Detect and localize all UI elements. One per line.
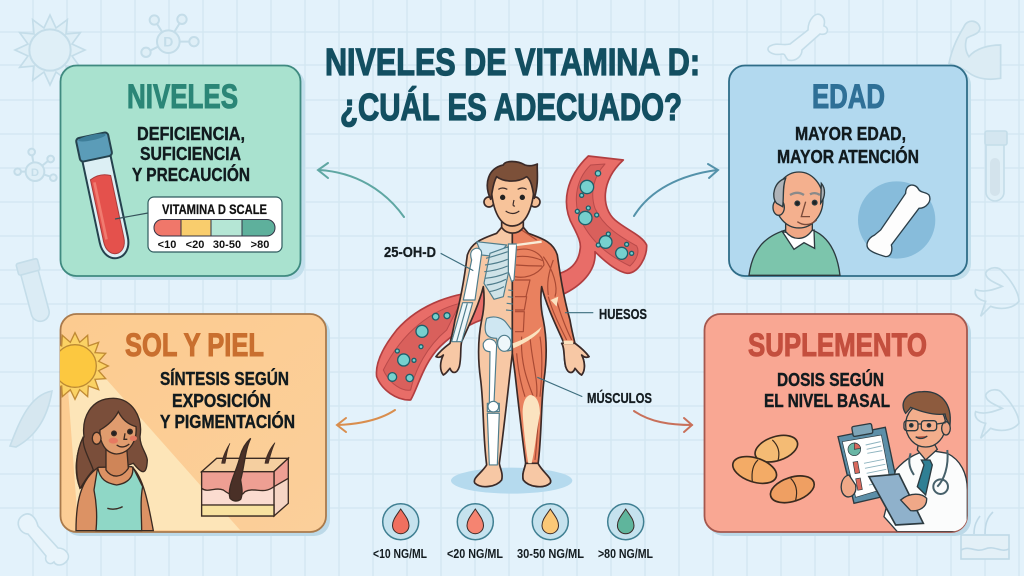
text: suplemento description: EL NIVEL BASAL <box>764 391 890 411</box>
icon: faded arm mid right <box>975 268 1019 316</box>
panel: edad <box>729 66 971 280</box>
icon: faded molecule left: D <box>31 167 39 179</box>
icon: faded molecule left <box>14 149 57 181</box>
tendons <box>513 297 573 463</box>
label: 25-OH-D: 25-OH-D <box>384 244 436 261</box>
label: huesos: HUESOS <box>599 306 647 323</box>
text: sol y piel description: Y PIGMENTACIÓN <box>160 411 295 432</box>
head <box>484 161 540 233</box>
legend item: 30 to 50: 30-50 NG/ML <box>517 546 584 561</box>
icon: faded tube left <box>16 258 53 324</box>
icon: faded skin block <box>961 512 1009 559</box>
icon: older man <box>749 172 840 275</box>
legend item: 30 to 50 <box>517 504 584 561</box>
text: niveles description <box>132 124 250 185</box>
icon: faded tube right <box>985 131 1007 201</box>
muscle detail <box>515 230 572 460</box>
sunlight beam <box>68 368 240 530</box>
vitamin d scale: VITAMINA D SCALE <box>162 201 267 217</box>
label: músculos: MÚSCULOS <box>587 389 652 407</box>
connector line <box>115 213 148 219</box>
text: edad description: MAYOR EDAD, <box>795 124 906 144</box>
icon: faded molecule top: D <box>163 34 173 50</box>
arrow: centre to sol y piel <box>337 410 395 432</box>
heading: suplemento: SUPLEMENTO <box>748 327 927 363</box>
ground shadow <box>451 468 572 494</box>
arrow: centre to edad <box>634 164 718 216</box>
body left half skin <box>436 227 512 487</box>
icon: faded bone top right <box>768 14 827 60</box>
icon: doctor <box>838 392 967 532</box>
legend item: under 10 <box>373 504 427 561</box>
icon: bone in circle <box>858 181 935 259</box>
artery upper <box>560 156 647 295</box>
vitamin d scale: <20 <box>186 239 204 251</box>
illustration: human body with vessel <box>376 156 647 494</box>
vitamin d scale <box>148 197 282 252</box>
vitamin d scale: 30-50 <box>213 239 241 251</box>
arrow: centre to niveles <box>318 163 404 217</box>
heading: niveles: NIVELES <box>127 78 238 116</box>
panel: niveles <box>60 66 305 280</box>
skin hands and feet <box>523 343 589 487</box>
legend item: under 20 <box>447 504 503 561</box>
text: edad description: MAYOR ATENCIÓN <box>777 146 919 167</box>
text: suplemento description <box>764 369 890 411</box>
icon: skin cross-section <box>202 438 288 516</box>
legend item: under 10: <10 NG/ML <box>373 546 427 561</box>
text: niveles description: Y PRECAUCIÓN <box>132 164 250 185</box>
text: sol y piel description: SÍNTESIS SEGÚN <box>160 368 289 389</box>
icon: faded arm lower right <box>975 390 1019 438</box>
body right half muscle <box>512 227 589 487</box>
title: ¿CUÁL ES ADECUADO? <box>340 85 682 129</box>
vitamin d scale: <10 <box>158 239 176 251</box>
legend item: over 80: >80 NG/ML <box>598 546 653 561</box>
text: sol y piel description <box>160 368 295 432</box>
vitamin d scale: >80 <box>251 239 269 251</box>
icon: faded arm top right <box>949 21 1001 79</box>
panel: suplemento <box>704 314 971 536</box>
heading: edad: EDAD <box>812 78 885 116</box>
leader lines <box>441 253 593 397</box>
text: suplemento description: DOSIS SEGÚN <box>777 369 884 390</box>
text: niveles description: SUFICIENCIA <box>140 144 241 164</box>
skeleton <box>452 242 542 465</box>
artery lower <box>376 292 487 400</box>
icon: sun <box>60 331 110 401</box>
icon: blood test tube <box>76 132 134 261</box>
title: NIVELES DE VITAMINA D: <box>325 42 700 84</box>
icon: faded sun <box>15 15 85 85</box>
icon: faded molecule top <box>141 15 199 57</box>
legend item: under 20: <20 NG/ML <box>447 546 503 561</box>
arrow: centre to suplemento <box>634 411 692 432</box>
panel: sol y piel <box>42 314 330 536</box>
legend item: over 80 <box>598 504 653 561</box>
icon: faded muscle <box>10 391 52 447</box>
title <box>325 42 700 129</box>
text: niveles description: DEFICIENCIA, <box>137 124 245 144</box>
icon: woman <box>76 398 153 531</box>
heading: sol y piel: SOL Y PIEL <box>125 327 264 363</box>
text: sol y piel description: EXPOSICIÓN <box>172 390 271 411</box>
icon: faded bone bottom left <box>18 514 68 565</box>
legend: levels <box>373 504 653 561</box>
text: edad description <box>777 124 919 167</box>
icon: capsules <box>732 434 815 504</box>
